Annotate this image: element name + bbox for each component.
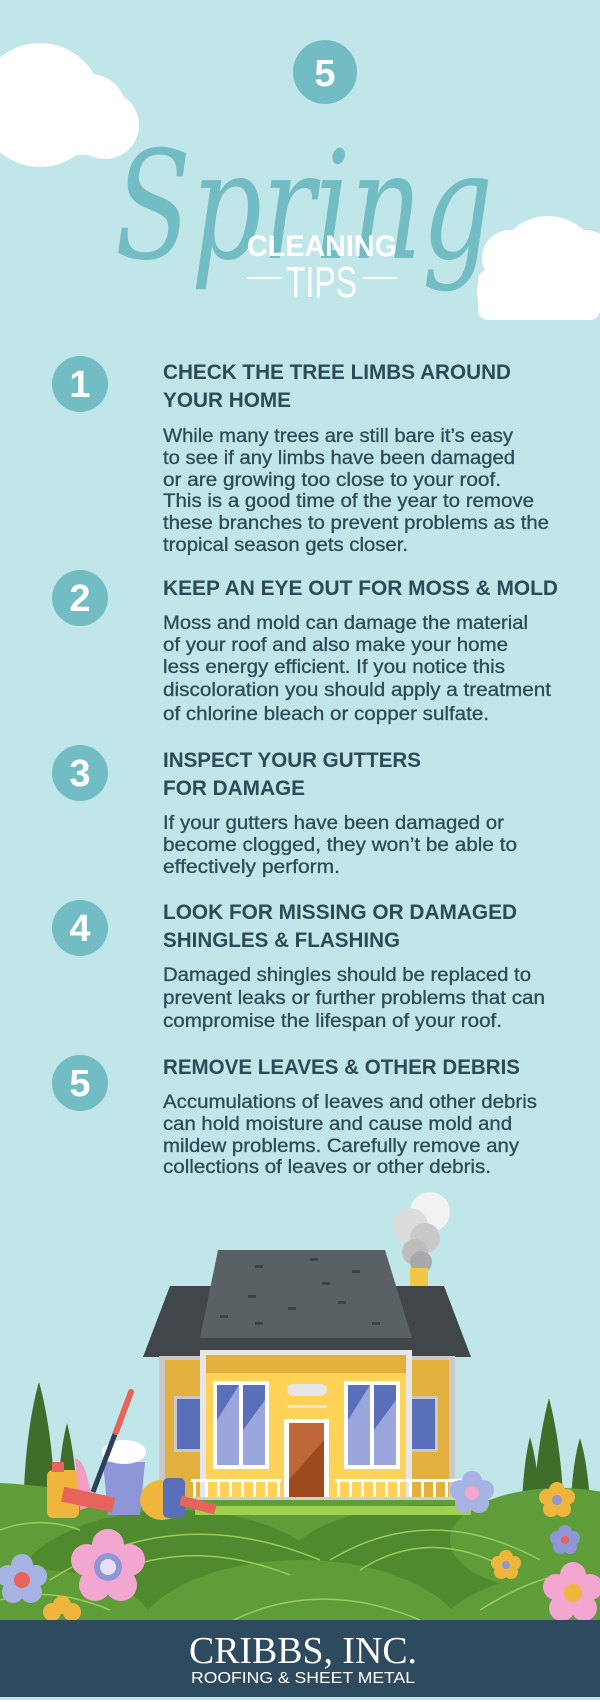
body 1: to see if any limbs have been damaged <box>163 448 515 469</box>
body 3: become clogged, they won’t be able to <box>163 835 517 856</box>
house <box>143 1250 478 1506</box>
body 1: While many trees are still bare it’s easy <box>163 426 514 447</box>
tip 1 <box>52 356 549 556</box>
number badge 4: 4 <box>69 908 91 950</box>
body 2: of your roof and also make your home <box>163 635 508 656</box>
body 2: less energy efficient. If you notice this <box>163 657 505 678</box>
body 1: This is a good time of the year to remove <box>163 491 534 512</box>
title badge: 5: 5 <box>314 53 336 95</box>
body 2: Moss and mold can damage the material <box>163 613 528 634</box>
number badge 1 <box>52 356 108 412</box>
number badge 3 <box>52 745 108 801</box>
cleaning supplies <box>47 1392 217 1520</box>
body 1: or are growing too close to your roof. <box>163 470 501 491</box>
number badge 1: 1 <box>69 364 91 406</box>
body 1 <box>163 426 549 556</box>
body 5: can hold moisture and cause mold and <box>163 1114 512 1135</box>
subtitle: TIPS with lines: TIPS <box>286 258 357 307</box>
tagline: ROOFING & SHEET METAL <box>191 1670 415 1687</box>
number badge 5 <box>52 1055 108 1111</box>
smoke <box>392 1192 450 1273</box>
body 4: Damaged shingles should be replaced to <box>163 965 531 986</box>
tip 2 <box>52 570 558 725</box>
tip 5 <box>52 1055 537 1178</box>
body 4: compromise the lifespan of your roof. <box>163 1011 502 1032</box>
trees <box>24 1382 591 1530</box>
subtitle: CLEANING: CLEANING <box>247 230 397 263</box>
title badge: 5 <box>293 40 357 104</box>
body 3: If your gutters have been damaged or <box>163 813 505 834</box>
footer <box>0 1620 600 1700</box>
body 3: effectively perform. <box>163 857 340 878</box>
heading 1: CHECK THE TREE LIMBS AROUND <box>163 361 511 384</box>
heading 1 <box>163 361 511 412</box>
heading 3 <box>163 749 421 800</box>
number badge 2: 2 <box>69 578 91 620</box>
cloud right <box>477 216 600 320</box>
body 3 <box>163 813 517 878</box>
number badge 3: 3 <box>69 753 91 795</box>
cloud left <box>0 43 139 167</box>
hills <box>0 1483 600 1700</box>
body 4 <box>163 965 545 1032</box>
heading 1: YOUR HOME <box>163 389 291 412</box>
heading 4: SHINGLES & FLASHING <box>163 929 400 952</box>
body 5: mildew problems. Carefully remove any <box>163 1136 520 1157</box>
company name: CRIBBS, INC. <box>189 1630 417 1672</box>
heading 3: FOR DAMAGE <box>163 777 305 800</box>
tip 3 <box>52 745 517 878</box>
heading 5: REMOVE LEAVES & OTHER DEBRIS <box>163 1056 520 1079</box>
number badge 4 <box>52 900 108 956</box>
flowers <box>0 1471 600 1621</box>
heading 4 <box>163 901 517 952</box>
body 2: discoloration you should apply a treatment <box>163 680 552 701</box>
number badge 2 <box>52 570 108 626</box>
body 1: tropical season gets closer. <box>163 535 408 556</box>
heading 3: INSPECT YOUR GUTTERS <box>163 749 421 772</box>
body 2 <box>163 613 552 725</box>
number badge 5: 5 <box>69 1063 91 1105</box>
heading 4: LOOK FOR MISSING OR DAMAGED <box>163 901 517 924</box>
body 5: collections of leaves or other debris. <box>163 1157 491 1178</box>
heading 2: KEEP AN EYE OUT FOR MOSS & MOLD <box>163 577 558 600</box>
body 4: prevent leaks or further problems that can <box>163 988 545 1009</box>
body 5: Accumulations of leaves and other debris <box>163 1092 537 1113</box>
body 1: these branches to prevent problems as the <box>163 513 549 534</box>
body 2: of chlorine bleach or copper sulfate. <box>163 704 489 725</box>
body 5 <box>163 1092 537 1178</box>
tip 4 <box>52 900 545 1032</box>
